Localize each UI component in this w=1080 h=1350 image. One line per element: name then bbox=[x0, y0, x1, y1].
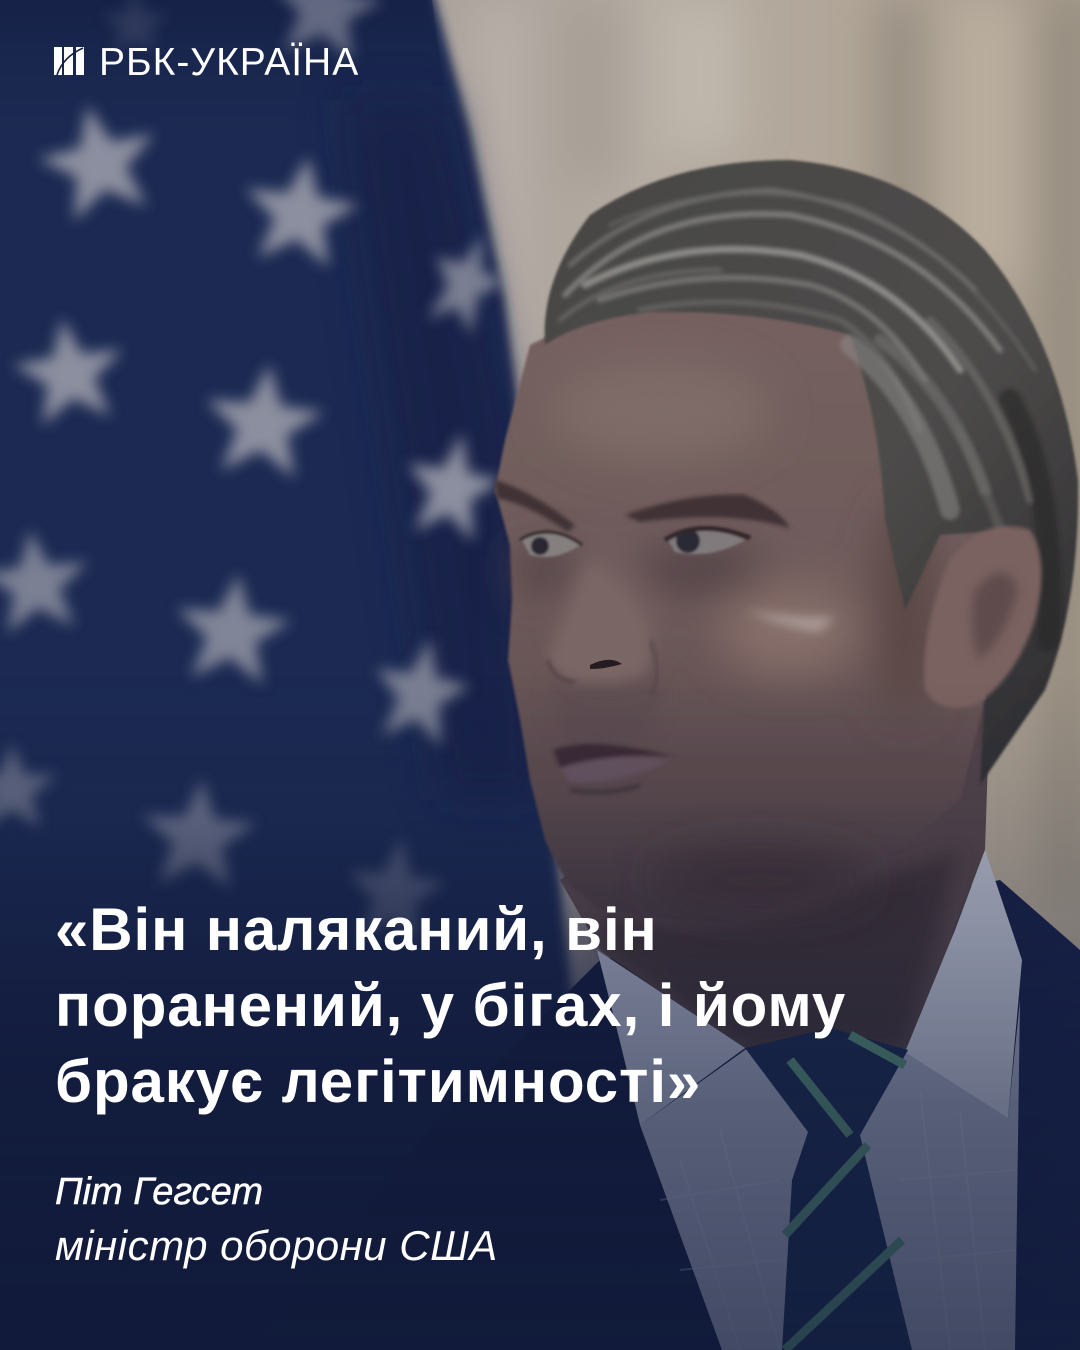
quote heading: «Він наляканий, він bbox=[55, 896, 658, 963]
head: face and skin bbox=[495, 290, 1000, 925]
suit jacket bbox=[567, 880, 1080, 1350]
nose bbox=[548, 578, 658, 686]
flag bbox=[0, 0, 576, 1182]
attribution: Піт Гегсет bbox=[55, 1171, 263, 1213]
neck bbox=[560, 700, 990, 1060]
quote heading: поранений, у бігах, і йому bbox=[55, 972, 846, 1039]
quote heading bbox=[55, 896, 846, 1115]
left collar bbox=[597, 950, 745, 1125]
hair bbox=[545, 160, 1078, 785]
attribution bbox=[55, 1171, 498, 1269]
quote heading: бракує легітимності» bbox=[55, 1048, 701, 1115]
logo icon bbox=[54, 47, 84, 75]
logo wordmark: РБК-УКРАЇНА bbox=[99, 41, 359, 84]
lower-left dark fade bbox=[0, 851, 611, 1350]
attribution: міністр оборони США bbox=[55, 1222, 498, 1269]
eyebrows bbox=[495, 480, 790, 532]
ear bbox=[924, 526, 1041, 708]
right collar bbox=[905, 850, 1022, 1118]
mouth bbox=[553, 744, 675, 792]
flag stars bbox=[0, 0, 518, 947]
eyes bbox=[520, 528, 750, 557]
cheek highlights bbox=[515, 360, 935, 910]
shirt collar and chest bbox=[597, 850, 1022, 1350]
logo bbox=[54, 41, 359, 84]
necktie bbox=[745, 1028, 912, 1350]
curtain backdrop bbox=[429, 0, 1080, 992]
bottom dark gradient overlay bbox=[0, 729, 1080, 1350]
